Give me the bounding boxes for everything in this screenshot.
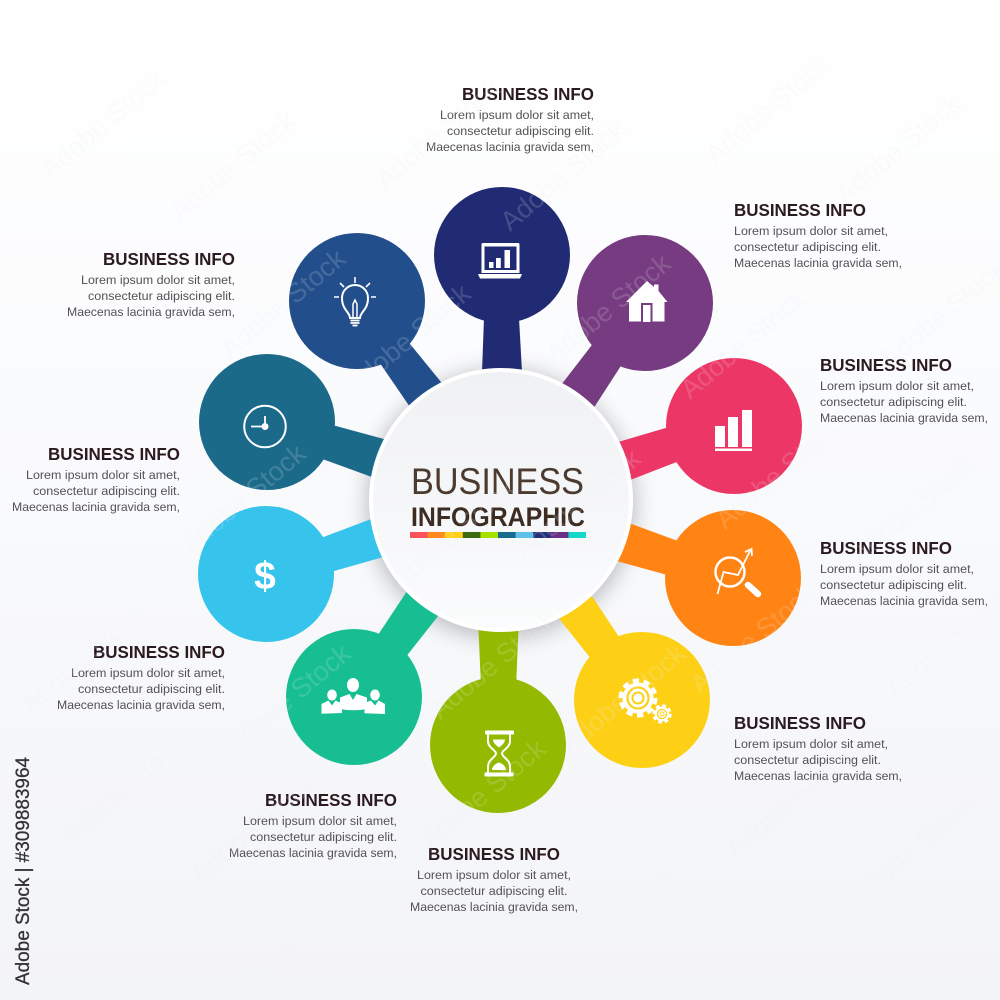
petal: yellow gears [558,594,710,768]
text block: cyan: Lorem ipsum dolor sit amet, [71,666,225,680]
text: Adobe Stock [55,728,192,850]
icon: laptop chart [478,243,522,278]
text: Adobe Stock [675,283,812,405]
text: Adobe Stock [370,73,507,195]
colour bar [410,532,586,538]
centre title: BUSINESS: BUSINESS [411,461,584,502]
text block: pink: Maecenas lacinia gravida sem, [820,411,988,425]
petal: purple house [561,235,713,409]
text block: green: Maecenas lacinia gravida sem, [410,900,578,914]
text block: orange [820,538,988,608]
text block: purple: consectetur adipiscing elit. [734,240,881,254]
text block: green: Lorem ipsum dolor sit amet, [417,868,571,882]
text block: yellow: consectetur adipiscing elit. [734,753,881,767]
icon: hourglass [484,730,514,776]
text block: top: BUSINESS INFO [462,84,594,104]
text block: yellow: Lorem ipsum dolor sit amet, [734,737,888,751]
icon: gears [620,680,670,722]
text block: orange: BUSINESS INFO [820,538,952,558]
petal: green hourglass [430,628,566,813]
text block: teal: Lorem ipsum dolor sit amet, [243,814,397,828]
shadow of centre disc [367,370,635,638]
text block: cyan: consectetur adipiscing elit. [78,682,225,696]
petal: orange magnifier [616,510,801,646]
text block: blue: BUSINESS INFO [103,249,235,269]
centre disc [369,368,633,632]
text block: dark teal: Lorem ipsum dolor sit amet, [26,468,180,482]
text block: dark teal: BUSINESS INFO [48,444,180,464]
text block: top [426,84,594,154]
text block: top: consectetur adipiscing elit. [447,124,594,138]
text: Adobe Stock [15,598,152,720]
text: Adobe Stock [830,88,967,210]
text block: purple [734,200,902,270]
text: Adobe Stock [685,578,822,700]
centre title: INFOGRAPHIC: INFOGRAPHIC [411,502,585,532]
text block: blue [67,249,235,319]
text block: teal: BUSINESS INFO [265,790,397,810]
text block: purple: Maecenas lacinia gravida sem, [734,256,902,270]
side stock label: Adobe Stock | #309883964 [13,757,34,985]
text block: blue: Lorem ipsum dolor sit amet, [81,273,235,287]
text: Adobe Stock [425,603,562,725]
petal: cyan dollar [198,506,385,642]
text block: teal [229,790,397,860]
text block: orange: consectetur adipiscing elit. [820,578,967,592]
text: Adobe Stock [510,443,647,565]
petal: blue bulb [289,233,443,408]
petal: dark teal clock [199,354,386,490]
text block: green: BUSINESS INFO [428,844,560,864]
text: Adobe Stock [415,733,552,855]
text block: pink: Lorem ipsum dolor sit amet, [820,379,974,393]
text block: yellow: BUSINESS INFO [734,713,866,733]
text block: yellow: Maecenas lacinia gravida sem, [734,769,902,783]
text block: blue: Maecenas lacinia gravida sem, [67,305,235,319]
text block: orange: Maecenas lacinia gravida sem, [820,594,988,608]
icon: people [322,678,385,714]
text block: top: Maecenas lacinia gravida sem, [426,140,594,154]
icon: house [626,281,668,322]
text block: teal: consectetur adipiscing elit. [250,830,397,844]
text block: purple: Lorem ipsum dolor sit amet, [734,224,888,238]
text block: dark teal: consectetur adipiscing elit. [33,484,180,498]
icon: dollar: $ [254,555,276,598]
icon: bar chart [715,410,752,451]
text block: blue: consectetur adipiscing elit. [88,289,235,303]
text block: teal: Maecenas lacinia gravida sem, [229,846,397,860]
text block: cyan: BUSINESS INFO [93,642,225,662]
text: Adobe Stock [220,638,357,760]
text block: dark teal [12,444,180,514]
icon: magnifier with trend arrow [716,549,758,594]
text block: orange: Lorem ipsum dolor sit amet, [820,562,974,576]
text: Adobe Stock [540,248,677,370]
text block: pink: BUSINESS INFO [820,355,952,375]
text: Adobe Stock [545,863,682,985]
text: Adobe Stock [385,473,522,595]
text block: purple: BUSINESS INFO [734,200,866,220]
text block: green [410,844,578,914]
text block: yellow [734,713,902,783]
text: Adobe Stock [845,448,982,570]
text block: cyan [57,642,225,712]
text: Adobe Stock [175,438,312,560]
text: Adobe Stock [700,48,837,170]
petal: navy laptop [434,187,570,372]
text: Adobe Stock [165,105,302,227]
petal: teal people [286,590,440,765]
text: Adobe Stock [215,243,352,365]
text: Adobe Stock [555,638,692,760]
text: Adobe Stock [35,63,172,185]
text: Adobe Stock [710,413,847,535]
text block: green: consectetur adipiscing elit. [420,884,568,898]
text: Adobe Stock [845,788,982,910]
text block: pink [820,355,988,425]
text: Adobe Stock [495,115,632,237]
text block: cyan: Maecenas lacinia gravida sem, [57,698,225,712]
icon: clock [244,406,286,447]
text: Adobe Stock [720,743,857,865]
petal: pink bars [617,358,802,494]
text: Adobe Stock [340,278,477,400]
text block: dark teal: Maecenas lacinia gravida sem, [12,500,180,514]
icon: light bulb [334,277,376,326]
text block: pink: consectetur adipiscing elit. [820,395,967,409]
text block: top: Lorem ipsum dolor sit amet, [440,108,594,122]
text: Adobe Stock [185,768,322,890]
